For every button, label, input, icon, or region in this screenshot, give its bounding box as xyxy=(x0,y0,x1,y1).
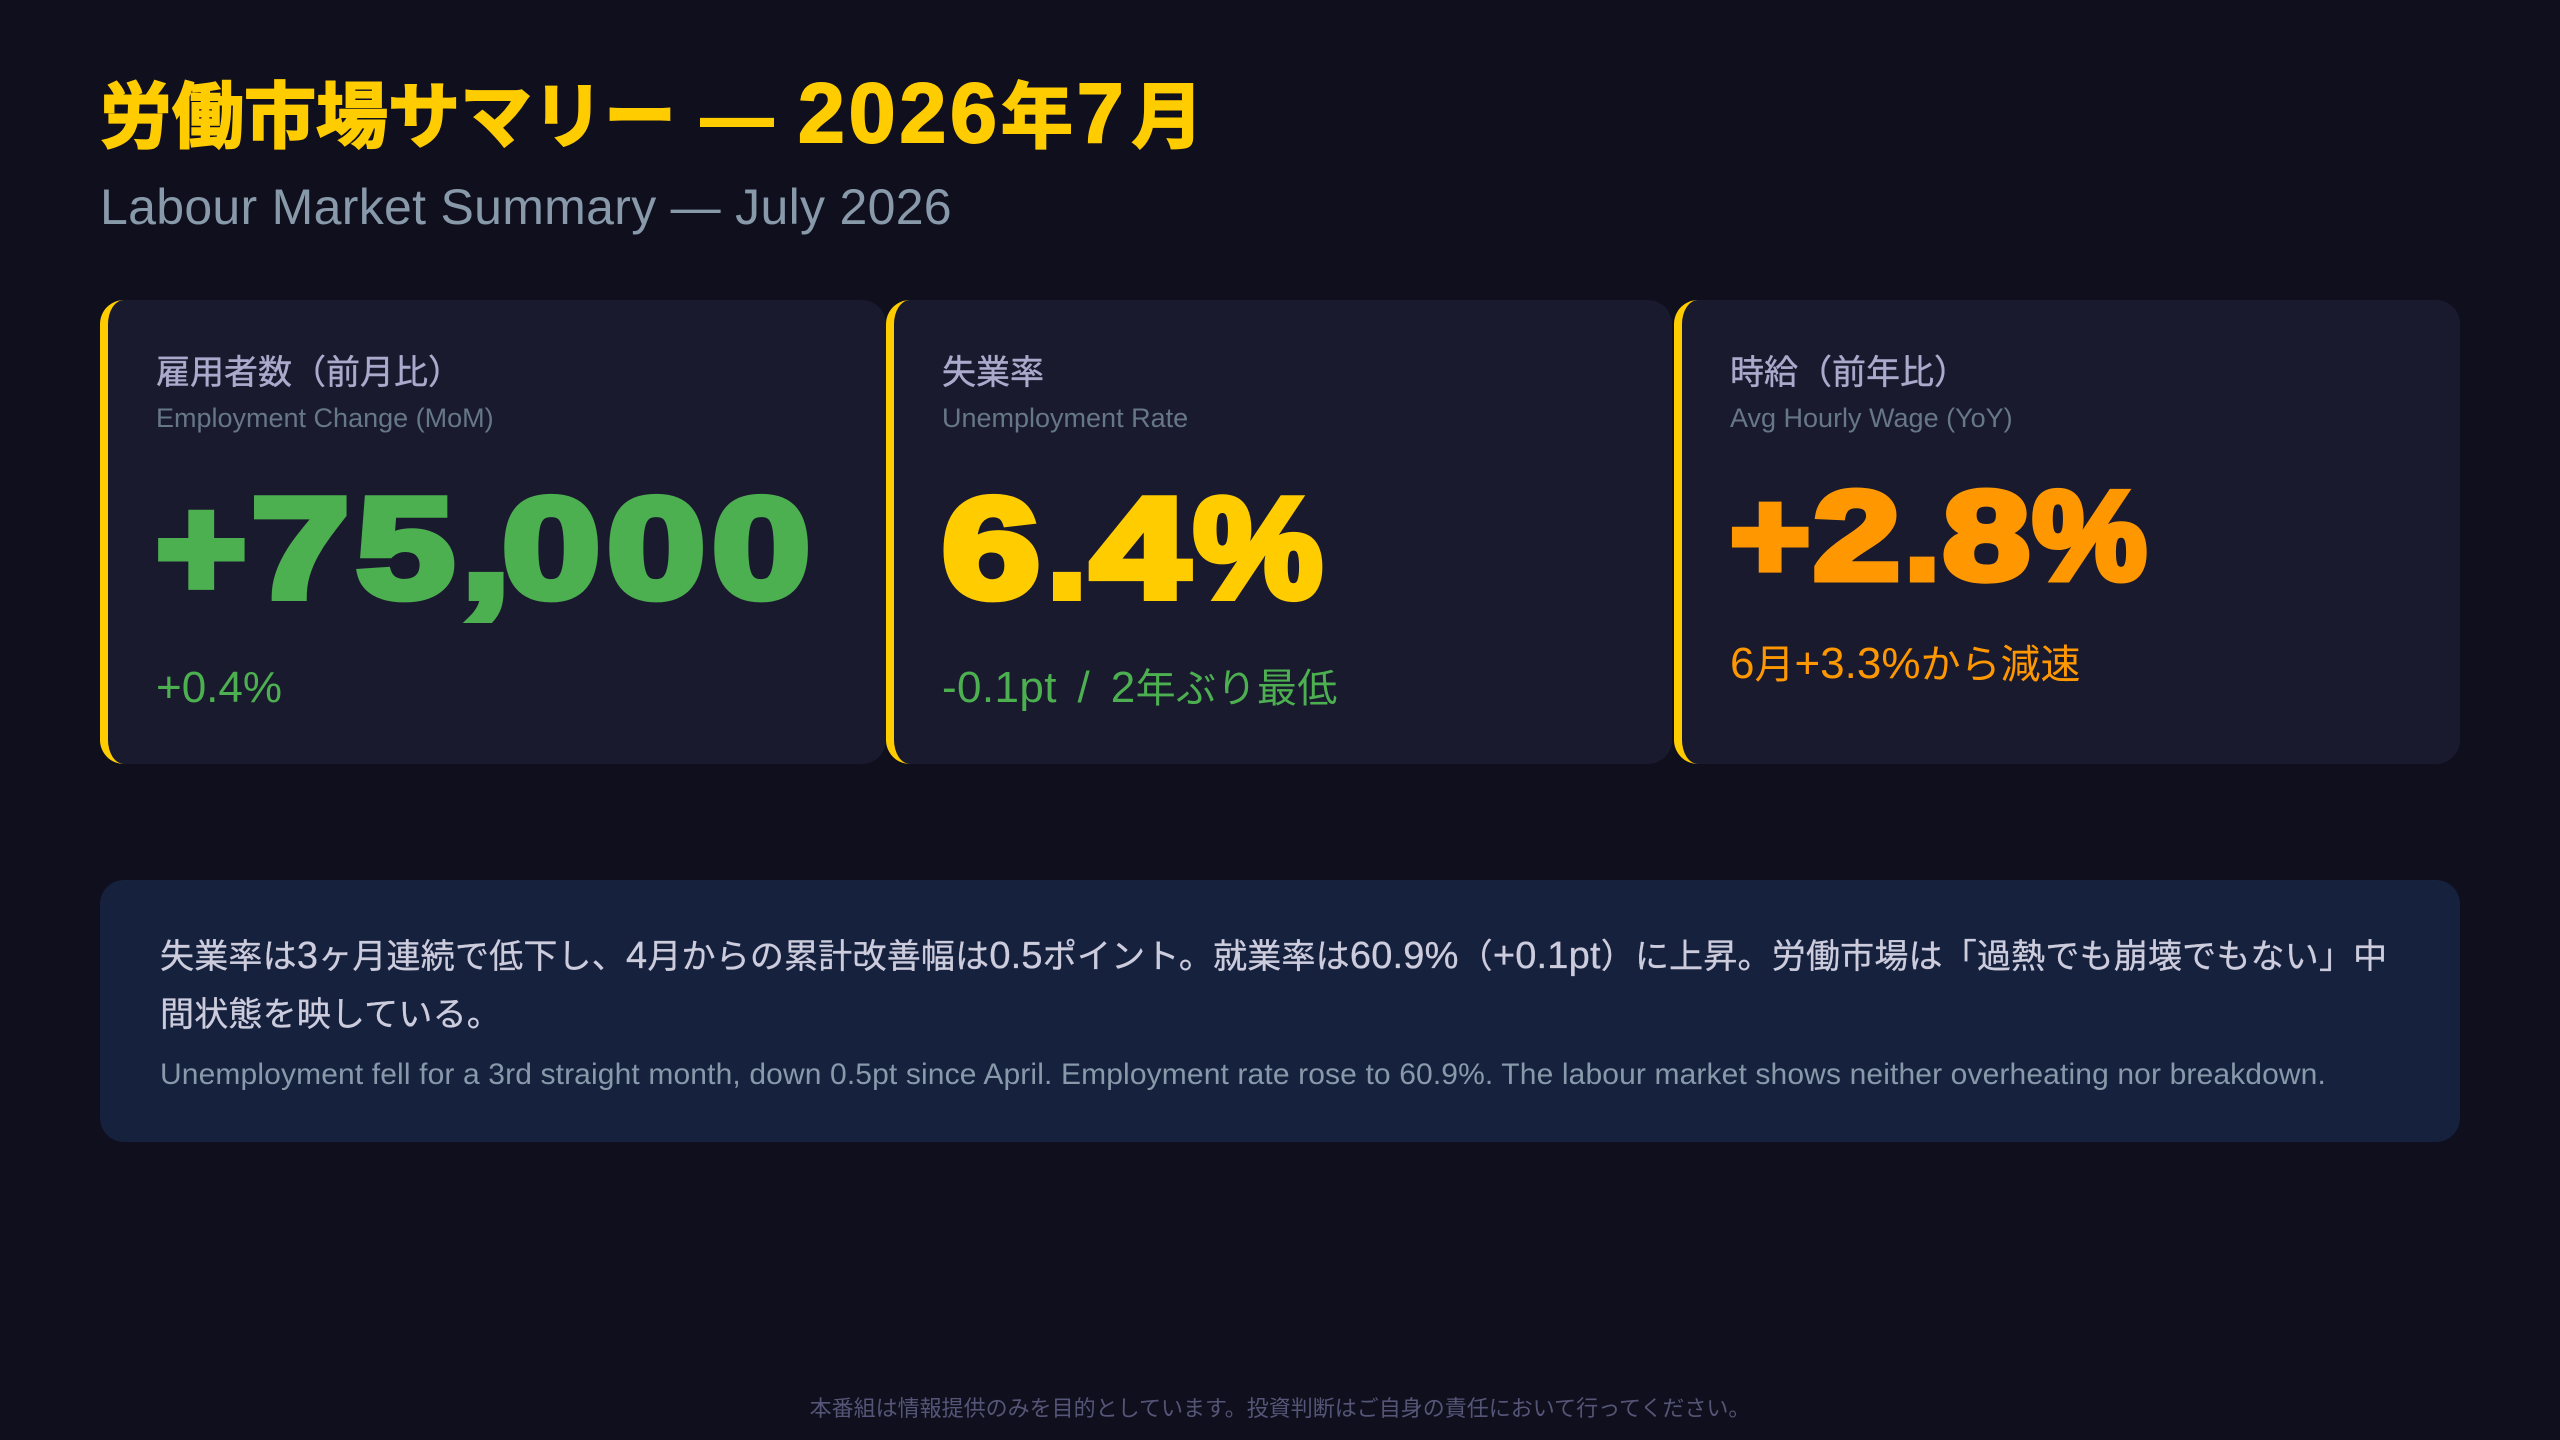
value: wage xyxy=(1730,465,2147,606)
delta: unemployment: -0.1pt / 2年ぶり最低 xyxy=(942,663,1338,712)
panel: hourly wage xyxy=(1674,300,2460,764)
value: employment: 75,000 xyxy=(251,469,817,628)
delta: wage: 6月+3.3%から減速 xyxy=(1730,639,2080,688)
label: wage EN: Avg Hourly Wage (YoY) xyxy=(1730,403,2013,433)
value: wage: . xyxy=(1905,465,1935,606)
value: wage: % xyxy=(2033,465,2147,606)
summary JP text: 失業率は3ヶ月連続で低下し、4月からの累計改善幅は0.5ポイント。就業率は60.9%（+0.1pt）に上昇。労働市場は「過熱でも崩壊でもない」中 xyxy=(160,935,2387,977)
value: unemployment: 6 4 xyxy=(942,469,1193,628)
value: wage: 2 8 xyxy=(1813,465,2033,606)
summary JP text: 間状態を映している。 xyxy=(160,996,501,1034)
label: unemployment EN: Unemployment Rate xyxy=(942,403,1188,433)
label: employment JP: 雇用者数（前月比） xyxy=(156,354,462,392)
title: 労働市場サマリー — 2026年7月 xyxy=(100,66,1204,160)
panel: employment change xyxy=(100,300,886,764)
subtitle: Labour Market Summary — July 2026 xyxy=(100,179,952,235)
value: wage: + xyxy=(1730,465,1803,606)
panel: unemployment rate xyxy=(886,300,1672,764)
summary JP text xyxy=(160,935,2387,1034)
footer disclaimer: 本番組は情報提供のみを目的としています。投資判断はご自身の責任において行ってください。 xyxy=(810,1396,1750,1421)
label: employment EN: Employment Change (MoM) xyxy=(156,403,494,433)
value: employment: + xyxy=(156,469,240,628)
summary EN text: Unemployment fell for a 3rd straight month, down 0.5pt since April. Employment rate rose to 60.9%. The labour market shows neither overheating nor breakdown. xyxy=(160,1058,2326,1091)
label: wage JP: 時給（前年比） xyxy=(1730,354,1968,392)
label: unemployment JP: 失業率 xyxy=(942,354,1044,392)
panel: summary xyxy=(100,880,2460,1142)
delta: employment: +0.4% xyxy=(156,663,282,712)
value: unemployment: . xyxy=(1047,469,1082,628)
value: unemployment: % xyxy=(1193,469,1322,628)
value: unemployment xyxy=(942,469,1322,628)
